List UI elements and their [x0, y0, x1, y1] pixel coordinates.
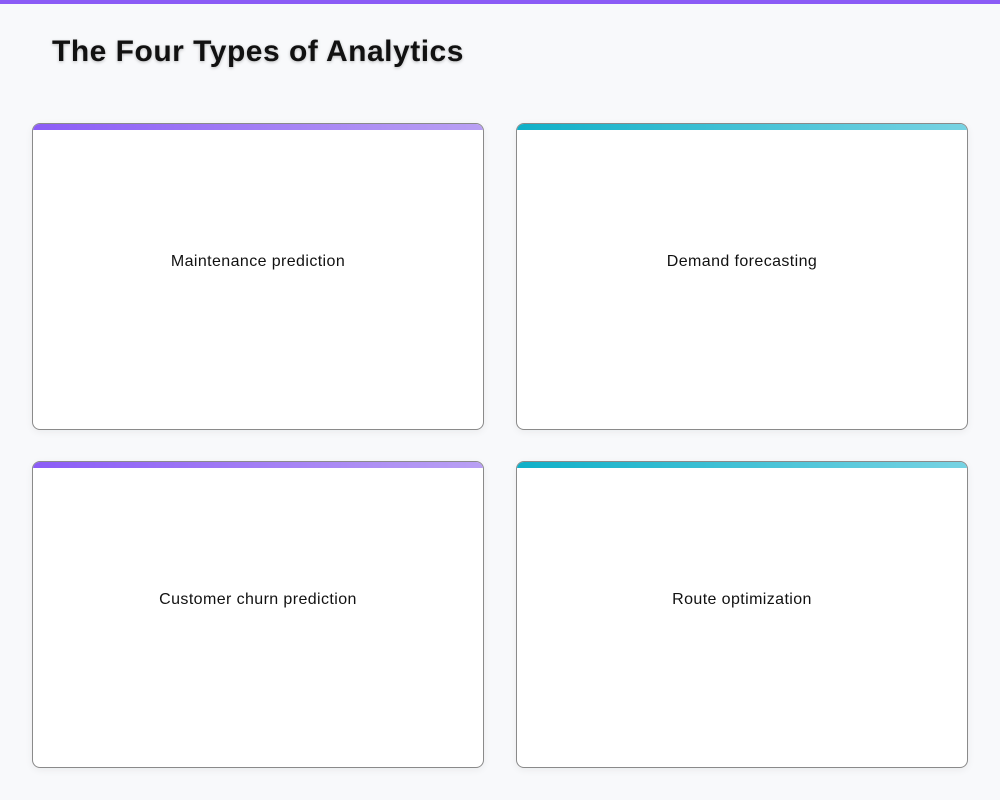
label: route optimization: Route optimization	[672, 591, 812, 608]
panel: customer churn prediction	[32, 461, 484, 768]
label: maintenance prediction: Maintenance prediction	[171, 253, 345, 270]
panel: demand forecasting	[516, 123, 968, 430]
panel: route optimization	[516, 461, 968, 768]
label: customer churn prediction: Customer churn prediction	[159, 591, 357, 608]
label: demand forecasting: Demand forecasting	[667, 253, 817, 270]
title: The Four Types of Analytics	[52, 35, 464, 68]
panel: maintenance prediction	[32, 123, 484, 430]
